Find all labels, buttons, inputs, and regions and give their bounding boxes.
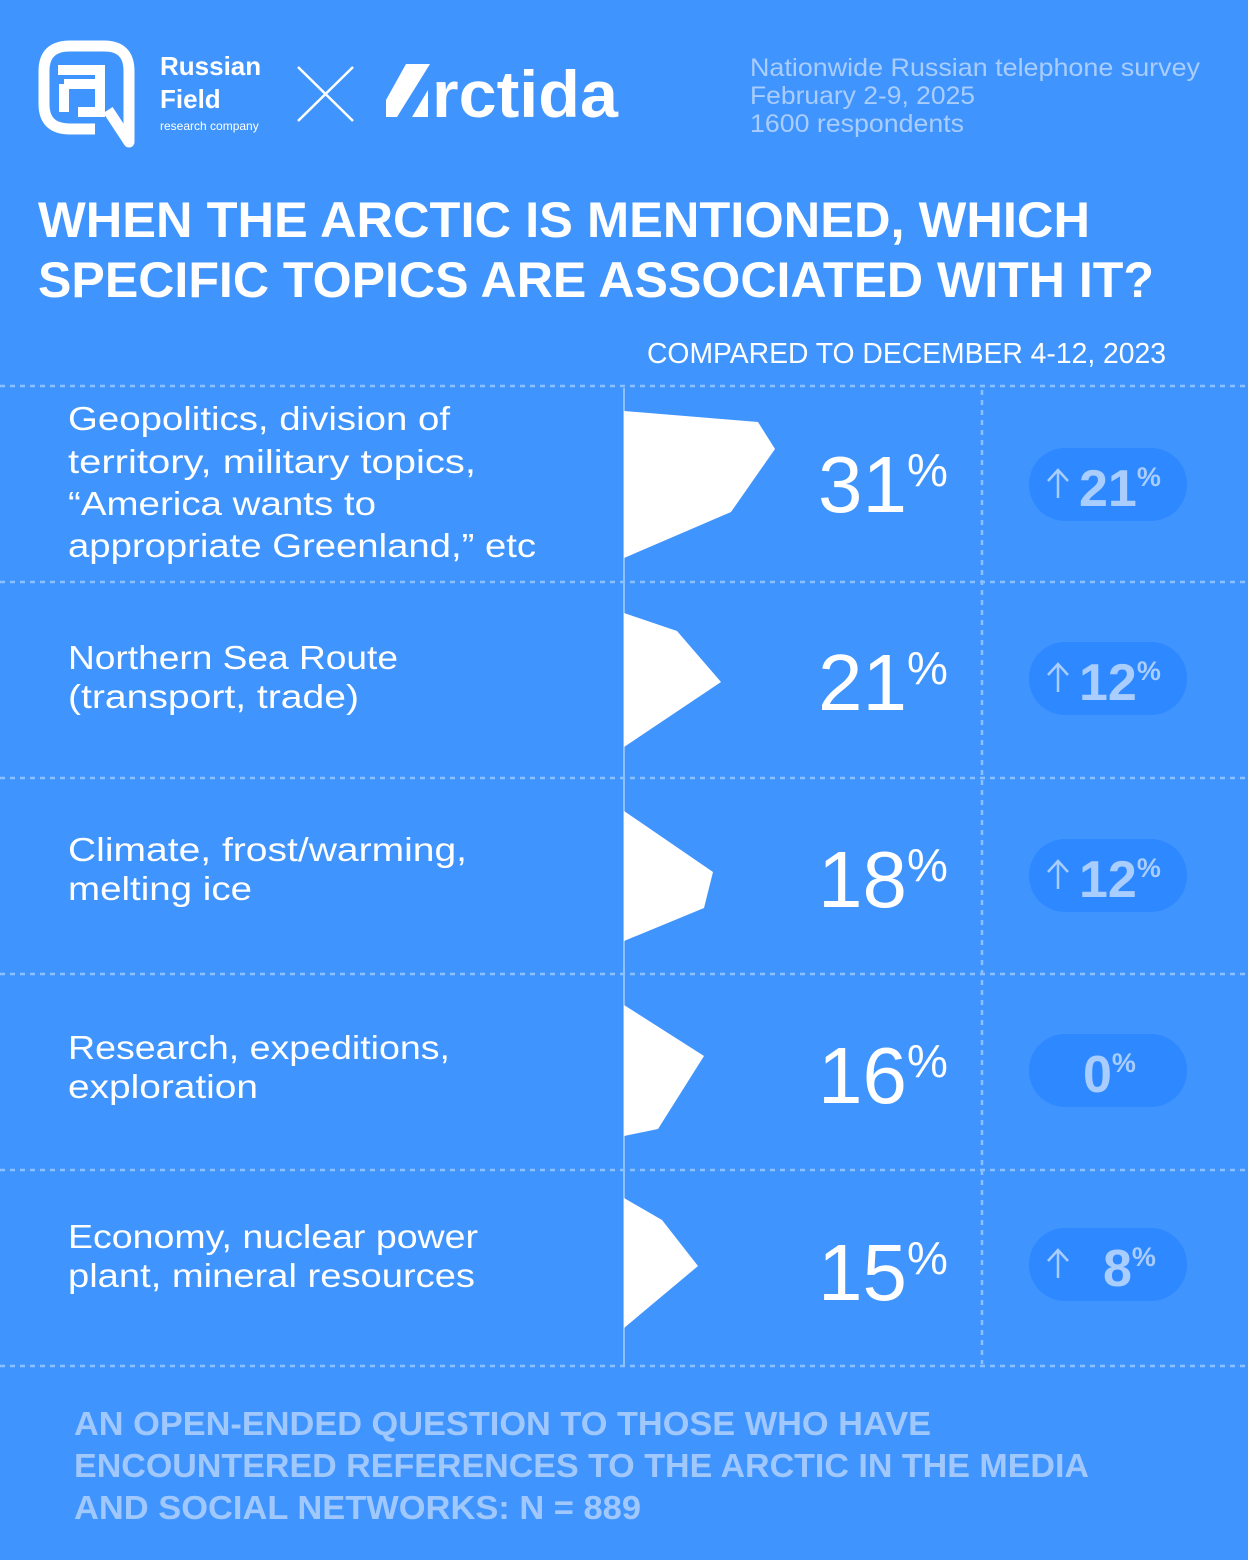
survey info: February 2-9, 2025: [750, 82, 975, 110]
change pill: [1029, 642, 1187, 715]
subtitle: comparison: COMPARED TO DECEMBER 4-12, 2023: [647, 338, 1166, 370]
label: exploration: [68, 1068, 258, 1105]
title: [38, 192, 1154, 308]
title: WHEN THE ARCTIC IS MENTIONED, WHICH: [38, 192, 1090, 248]
label: [68, 400, 536, 564]
label: Northern Sea Route: [68, 639, 398, 676]
label: [68, 1218, 478, 1294]
row 5: economy: [68, 1198, 1187, 1328]
value: %: [907, 1232, 948, 1284]
change pill: [1029, 448, 1187, 521]
value: 18: [818, 835, 907, 924]
label: [68, 1029, 450, 1105]
label: [68, 831, 467, 907]
value: 15: [818, 1228, 907, 1317]
value: 21: [818, 638, 907, 727]
label: melting ice: [68, 870, 252, 907]
label: “America wants to: [68, 485, 376, 522]
label: Climate, frost/warming,: [68, 831, 467, 868]
change pill: [1029, 1228, 1187, 1301]
logo: Russian Field: research company: [160, 119, 259, 133]
label: Economy, nuclear power: [68, 1218, 478, 1255]
survey info: Nationwide Russian telephone survey: [750, 54, 1201, 82]
change pill: 0: [1083, 1046, 1112, 1104]
logo: Russian Field: [44, 46, 261, 142]
logo: Arctida: rctida: [432, 57, 619, 131]
label: Research, expeditions,: [68, 1029, 450, 1066]
shape: [624, 613, 721, 747]
label: territory, military topics,: [68, 443, 476, 480]
logo: Russian Field: Russian: [160, 51, 261, 81]
footer note: [74, 1405, 1089, 1526]
change pill: [1029, 839, 1187, 912]
survey info: 1600 respondents: [750, 110, 964, 138]
row 2: northern sea route: [68, 613, 1187, 747]
label: (transport, trade): [68, 678, 359, 715]
row 3: climate: [68, 811, 1187, 941]
icon: cross: [298, 67, 353, 121]
change pill: %: [1132, 1242, 1156, 1272]
value: 31: [818, 440, 907, 529]
change pill: %: [1112, 1048, 1136, 1078]
change pill: %: [1137, 656, 1161, 686]
label: plant, mineral resources: [68, 1257, 475, 1294]
value: %: [907, 839, 948, 891]
value: 16: [818, 1031, 907, 1120]
shape: [624, 1005, 704, 1136]
shape: [624, 411, 775, 558]
title: SPECIFIC TOPICS ARE ASSOCIATED WITH IT?: [38, 252, 1154, 308]
change pill: 12: [1079, 654, 1137, 712]
row 1: geopolitics: [68, 400, 1187, 564]
label: appropriate Greenland,” etc: [68, 527, 536, 564]
survey info: [750, 54, 1201, 138]
shape: [624, 811, 713, 941]
change pill: %: [1137, 462, 1161, 492]
change pill: %: [1137, 853, 1161, 883]
change pill: 12: [1079, 851, 1137, 909]
change pill: 21: [1079, 460, 1137, 518]
footer note: AND SOCIAL NETWORKS: N = 889: [74, 1489, 641, 1526]
change pill: 8: [1103, 1240, 1132, 1298]
footer note: ENCOUNTERED REFERENCES TO THE ARCTIC IN THE MEDIA: [74, 1447, 1089, 1484]
label: Geopolitics, division of: [68, 400, 451, 437]
row 4: research: [68, 1005, 1187, 1136]
change pill: [1029, 1034, 1187, 1107]
value: %: [907, 444, 948, 496]
value: %: [907, 642, 948, 694]
logo: Russian Field: Field: [160, 84, 221, 114]
shape: [624, 1198, 698, 1328]
label: [68, 639, 398, 715]
footer note: AN OPEN-ENDED QUESTION TO THOSE WHO HAVE: [74, 1405, 931, 1442]
value: %: [907, 1035, 948, 1087]
